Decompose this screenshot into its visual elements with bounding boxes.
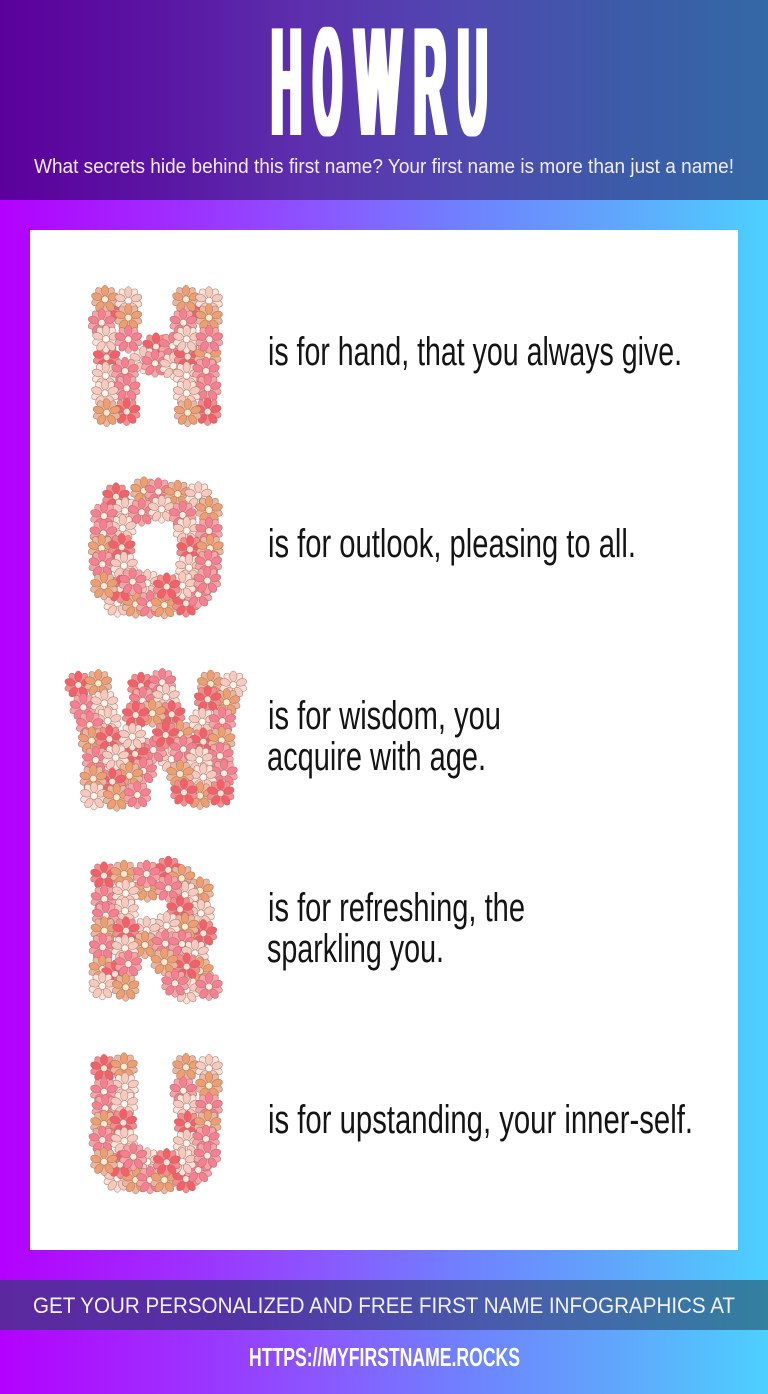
sentence for O: is for outlook, pleasing to all.	[268, 522, 636, 566]
header band	[0, 0, 768, 200]
title: O	[314, 0, 342, 168]
footer band	[0, 1280, 768, 1330]
title: W	[355, 0, 401, 168]
letter W made of flowers	[64, 668, 248, 811]
title: H	[272, 0, 302, 168]
letter H made of flowers	[87, 285, 224, 427]
sentence for R	[267, 886, 525, 971]
sentence for W: acquire with age.	[267, 735, 486, 779]
letter R made of flowers	[88, 856, 223, 1004]
sentence for R: sparkling you.	[267, 927, 444, 971]
letter O made of flowers	[87, 477, 224, 619]
title	[272, 0, 487, 168]
footer call to action: GET YOUR PERSONALIZED AND FREE FIRST NAME INFOGRAPHICS AT	[33, 1293, 735, 1318]
text: U	[458, 0, 487, 168]
footer url: HTTPS://MYFIRSTNAME.ROCKS	[249, 1342, 520, 1372]
subtitle: What secrets hide behind this first name? Your first name is more than just a name!	[34, 156, 734, 178]
sentence for W	[267, 694, 501, 779]
title: R	[414, 0, 446, 168]
sentence for W: is for wisdom, you	[268, 694, 501, 738]
letter U made of flowers	[88, 1053, 223, 1194]
sentence for R: is for refreshing, the	[268, 886, 525, 930]
white content panel	[30, 230, 738, 1250]
